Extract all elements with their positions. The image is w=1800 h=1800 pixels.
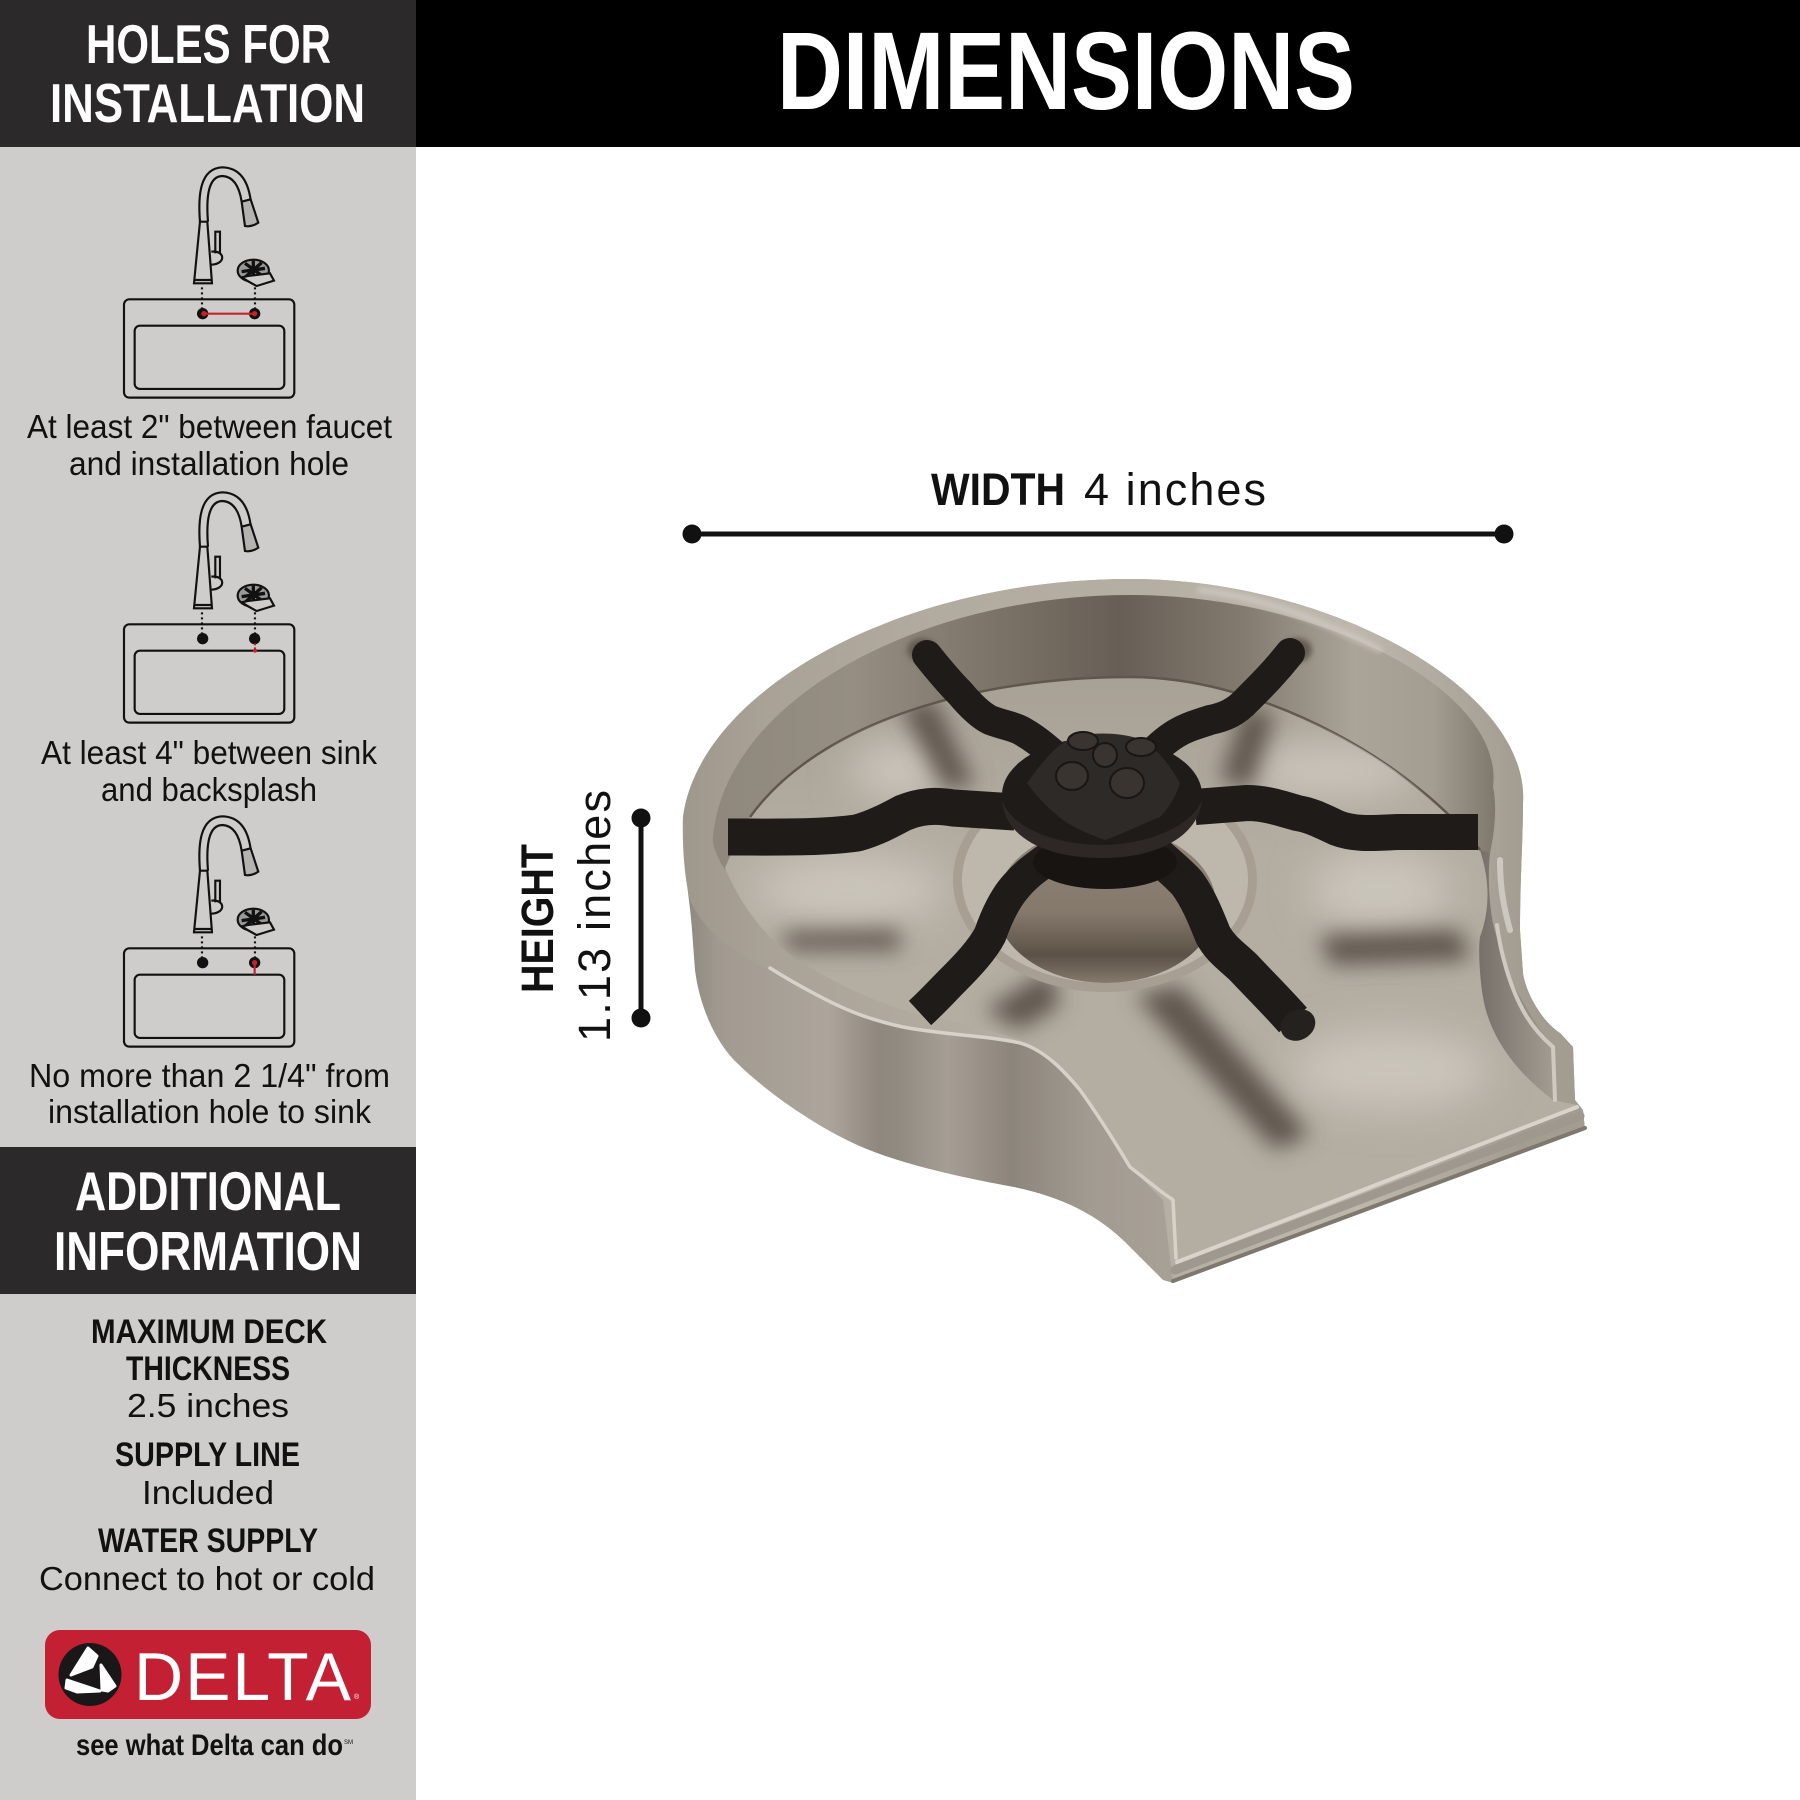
header: additional information: ADDITIONAL bbox=[75, 1160, 341, 1222]
spoke end cap bbox=[1275, 1003, 1321, 1047]
panel: left sidebar bbox=[0, 147, 416, 1800]
header: additional information: INFORMATION bbox=[54, 1220, 362, 1282]
spoke tip shadows bbox=[907, 638, 1312, 662]
tagline: SM bbox=[344, 1740, 353, 1746]
icon: faucet and sink, distance between sink and backsplash bbox=[124, 492, 294, 723]
caption: hole to sink distance: No more than 2 1/4" from bbox=[29, 1057, 390, 1094]
dimension: width: 4 inches bbox=[1084, 464, 1266, 515]
spec: maximum deck thickness bbox=[91, 1313, 327, 1424]
caption: backsplash distance: and backsplash bbox=[101, 771, 317, 808]
logo: Delta bbox=[45, 1630, 371, 1719]
icon: faucet and sink, distance from hole to sink bbox=[124, 816, 294, 1047]
caption: hole to sink distance bbox=[29, 1057, 390, 1130]
dimension: width: WIDTH bbox=[931, 464, 1065, 515]
outer body side wall bbox=[683, 579, 1585, 1283]
logo: Delta: ® bbox=[354, 1693, 360, 1701]
title bar: dimensions: DIMENSIONS bbox=[777, 10, 1355, 133]
header: additional information bbox=[0, 1147, 416, 1294]
spec: maximum deck thickness: MAXIMUM DECK bbox=[91, 1313, 327, 1351]
spec: supply line: SUPPLY LINE bbox=[115, 1436, 300, 1474]
caption: hole to sink distance: installation hole to sink bbox=[48, 1093, 371, 1130]
rim highlights bbox=[770, 590, 1585, 1281]
product photo: glass rinser bbox=[683, 579, 1585, 1283]
header: holes for installation bbox=[0, 0, 416, 147]
caption: backsplash distance bbox=[41, 734, 377, 808]
spray hub bbox=[1002, 732, 1202, 889]
caption: faucet distance: and installation hole bbox=[69, 445, 349, 482]
icon: faucet and sink, distance between faucet and hole bbox=[124, 167, 294, 398]
raised centre pedestal bbox=[953, 768, 1257, 992]
floor reflections bbox=[755, 700, 1490, 1150]
header: holes for installation: INSTALLATION bbox=[50, 72, 365, 134]
spec: water supply: WATER SUPPLY bbox=[98, 1522, 318, 1560]
spec: maximum deck thickness: 2.5 inches bbox=[127, 1387, 289, 1424]
dimension: height bbox=[512, 790, 650, 1042]
spec: supply line bbox=[115, 1436, 300, 1511]
right spout wall bbox=[1479, 850, 1555, 1100]
inner bowl wall bbox=[713, 595, 1495, 900]
floor back edge line bbox=[750, 677, 1480, 850]
header: holes for installation: HOLES FOR bbox=[86, 13, 331, 75]
dimension: height: HEIGHT bbox=[512, 844, 563, 993]
dimension: width bbox=[682, 464, 1514, 544]
tagline: see what Delta can do bbox=[76, 1729, 343, 1762]
caption: backsplash distance: At least 4" between sink bbox=[41, 734, 377, 771]
floor of tray bbox=[725, 677, 1577, 1262]
caption: faucet distance: At least 2" between faucet bbox=[27, 408, 392, 445]
spec: maximum deck thickness: THICKNESS bbox=[126, 1350, 290, 1388]
dimension: height: 1.13 inches bbox=[569, 790, 620, 1042]
spec: water supply bbox=[39, 1522, 375, 1597]
title bar: dimensions bbox=[416, 0, 1800, 147]
top rim bbox=[683, 579, 1585, 1283]
spec: supply line: Included bbox=[142, 1474, 274, 1511]
logo: Delta: DELTA bbox=[134, 1639, 352, 1715]
caption: faucet distance bbox=[27, 408, 392, 482]
spec: water supply: Connect to hot or cold bbox=[39, 1560, 375, 1597]
black spokes bbox=[728, 653, 1478, 1020]
